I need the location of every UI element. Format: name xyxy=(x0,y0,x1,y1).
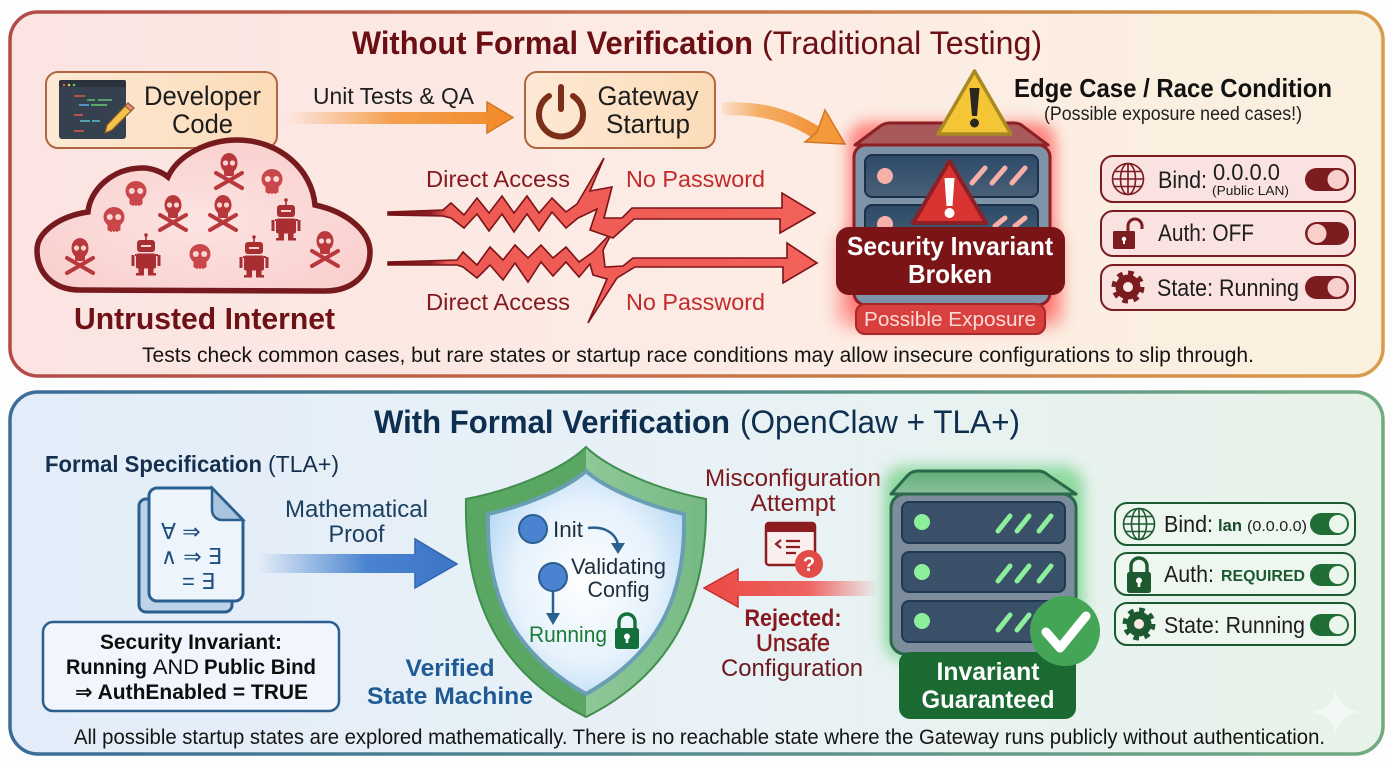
icon: power xyxy=(539,87,583,136)
box: security invariant xyxy=(43,622,339,711)
banner: invariant guaranteed: Invariant xyxy=(936,658,1040,686)
labels: direct access and no password xyxy=(426,166,765,315)
icon: code window with pencil xyxy=(59,80,134,139)
title: without formal verification: (Traditional Testing) xyxy=(762,25,1042,61)
label: verified state machine: State Machine xyxy=(367,683,533,710)
toggle: bind lan: (0.0.0.0) xyxy=(1247,518,1307,535)
toggle: bind lan: Bind: xyxy=(1164,511,1213,537)
box: gateway startup: Gateway xyxy=(598,81,699,111)
title: without formal verification xyxy=(352,25,1042,61)
icon: gear xyxy=(1114,273,1142,301)
labels: direct access and no password: Direct Access xyxy=(426,289,570,315)
icon: globe xyxy=(1124,508,1154,540)
box: security invariant: Running xyxy=(66,656,147,679)
toggle: bind: (Public LAN) xyxy=(1212,183,1289,198)
title: without formal verification: Without Formal Verification xyxy=(352,25,753,61)
arrow: curved to server xyxy=(722,109,845,144)
toggle: state running xyxy=(1101,265,1355,310)
label: verified state machine: Verified xyxy=(406,655,494,682)
heading: formal specification: Formal Specification xyxy=(45,451,262,477)
label: rejected unsafe configuration: Configuration xyxy=(721,655,863,682)
state: validating config: Config xyxy=(588,577,650,602)
toggle: state running xyxy=(1115,603,1355,645)
box: security invariant: AND xyxy=(153,656,199,679)
label: misconfiguration attempt xyxy=(705,465,881,517)
arrow: unit tests and QA: Unit Tests & QA xyxy=(313,83,475,109)
icon: config window with question mark xyxy=(766,523,823,578)
banner: security invariant broken: Broken xyxy=(908,259,992,289)
toggle: auth required: Auth: xyxy=(1164,561,1214,587)
caption: all possible startup states: All possible startup states are explored mathematically. There is no reachable state where the Gateway runs publicly without authentication. xyxy=(74,726,1325,749)
icon: yellow warning triangle xyxy=(938,71,1011,134)
title: with formal verification: With Formal Verification xyxy=(374,404,730,440)
state: validating config: Validating xyxy=(571,554,666,579)
icon: spec document: = ∃ xyxy=(182,569,215,594)
toggle: state running: State: Running xyxy=(1164,612,1305,638)
toggle: bind lan: lan xyxy=(1218,516,1242,535)
state: validating config xyxy=(539,554,666,625)
toggle: bind lan xyxy=(1115,503,1355,545)
state: init: Init xyxy=(553,517,583,542)
labels: direct access and no password: No Password xyxy=(626,289,765,315)
box: security invariant: Security Invariant: xyxy=(100,631,282,654)
toggle: bind xyxy=(1101,156,1355,202)
title: with formal verification: (OpenClaw + TLA+) xyxy=(740,404,1020,440)
badge: possible exposure xyxy=(856,304,1045,334)
toggle: auth off: Auth: OFF xyxy=(1158,220,1254,247)
caption: tests check common cases: Tests check common cases, but rare states or startup race conditions may allow insecure configurations to slip through. xyxy=(142,344,1254,367)
toggle: bind: 0.0.0.0 xyxy=(1213,159,1280,185)
skulls xyxy=(67,153,338,273)
state: running with lock: Running xyxy=(529,622,607,647)
arrow: rejected xyxy=(704,569,878,607)
toggle: state running: State: Running xyxy=(1157,275,1299,302)
arrow: mathematical proof: Proof xyxy=(328,521,385,548)
server: compromised xyxy=(834,122,1066,330)
icon: spec document: ∧ ⇒ ∃ xyxy=(161,544,222,569)
label: misconfiguration attempt: Misconfiguration xyxy=(705,465,881,492)
heading: edge case: (Possible exposure need cases!) xyxy=(1044,104,1302,125)
box: developer code: Code xyxy=(172,109,233,139)
icon: lock xyxy=(1127,558,1151,593)
arrow: mathematical proof: Mathematical xyxy=(285,496,428,523)
labels: direct access and no password: No Password xyxy=(626,166,765,192)
icon: spec document xyxy=(139,488,243,612)
box: gateway startup xyxy=(525,72,715,148)
banner: security invariant broken: Security Invariant xyxy=(847,231,1053,261)
heading: formal specification: (TLA+) xyxy=(268,451,339,477)
robots xyxy=(132,198,300,278)
box: developer code: Developer xyxy=(144,81,261,111)
state: init xyxy=(519,515,625,554)
label: rejected unsafe configuration: Rejected: xyxy=(744,605,842,632)
icon: gear xyxy=(1125,610,1153,638)
icon: sparkle watermark xyxy=(1311,688,1360,736)
title: with formal verification xyxy=(374,404,1020,440)
label: rejected unsafe configuration: Unsafe xyxy=(756,630,830,657)
panel: with formal verification xyxy=(10,392,1383,754)
panel: without formal verification xyxy=(10,12,1383,376)
state: running with lock xyxy=(529,614,639,649)
box: gateway startup: Startup xyxy=(606,109,690,139)
arrow: mathematical proof xyxy=(258,496,457,588)
icon: green check xyxy=(1030,596,1100,666)
heading: edge case: Edge Case / Race Condition xyxy=(1014,73,1332,103)
box: security invariant: Public Bind xyxy=(204,656,316,679)
arrow: unit tests and QA xyxy=(286,83,513,133)
label: rejected unsafe configuration xyxy=(721,605,863,682)
icon: config window with question mark: ? xyxy=(803,554,815,576)
icon: spec document: ∀ ⇒ xyxy=(161,519,201,544)
icon: open lock xyxy=(1113,219,1142,249)
arrow: lightning attack upper xyxy=(388,158,815,238)
cloud: untrusted internet xyxy=(37,140,370,291)
banner: invariant guaranteed: Guaranteed xyxy=(922,686,1054,714)
shield: verified state machine xyxy=(466,447,706,717)
box: developer code xyxy=(46,72,277,148)
icon: globe xyxy=(1112,164,1144,194)
heading: edge case xyxy=(1014,73,1332,125)
toggle: auth off xyxy=(1101,211,1355,256)
banner: security invariant broken xyxy=(836,227,1065,295)
icon: red warning triangle xyxy=(913,161,986,223)
banner: invariant guaranteed xyxy=(899,652,1076,719)
label: misconfiguration attempt: Attempt xyxy=(750,490,836,517)
toggle: auth required: REQUIRED xyxy=(1221,568,1305,585)
label: untrusted internet: Untrusted Internet xyxy=(74,301,335,336)
arrow: lightning attack lower xyxy=(388,231,817,323)
toggle: bind: Bind: xyxy=(1158,167,1207,194)
server: protected xyxy=(884,466,1084,661)
labels: direct access and no password: Direct Access xyxy=(426,166,570,192)
badge: possible exposure: Possible Exposure xyxy=(864,309,1036,331)
label: verified state machine xyxy=(367,655,533,710)
toggle: auth required xyxy=(1115,553,1355,595)
box: security invariant: ⇒ AuthEnabled = TRUE xyxy=(75,681,308,704)
